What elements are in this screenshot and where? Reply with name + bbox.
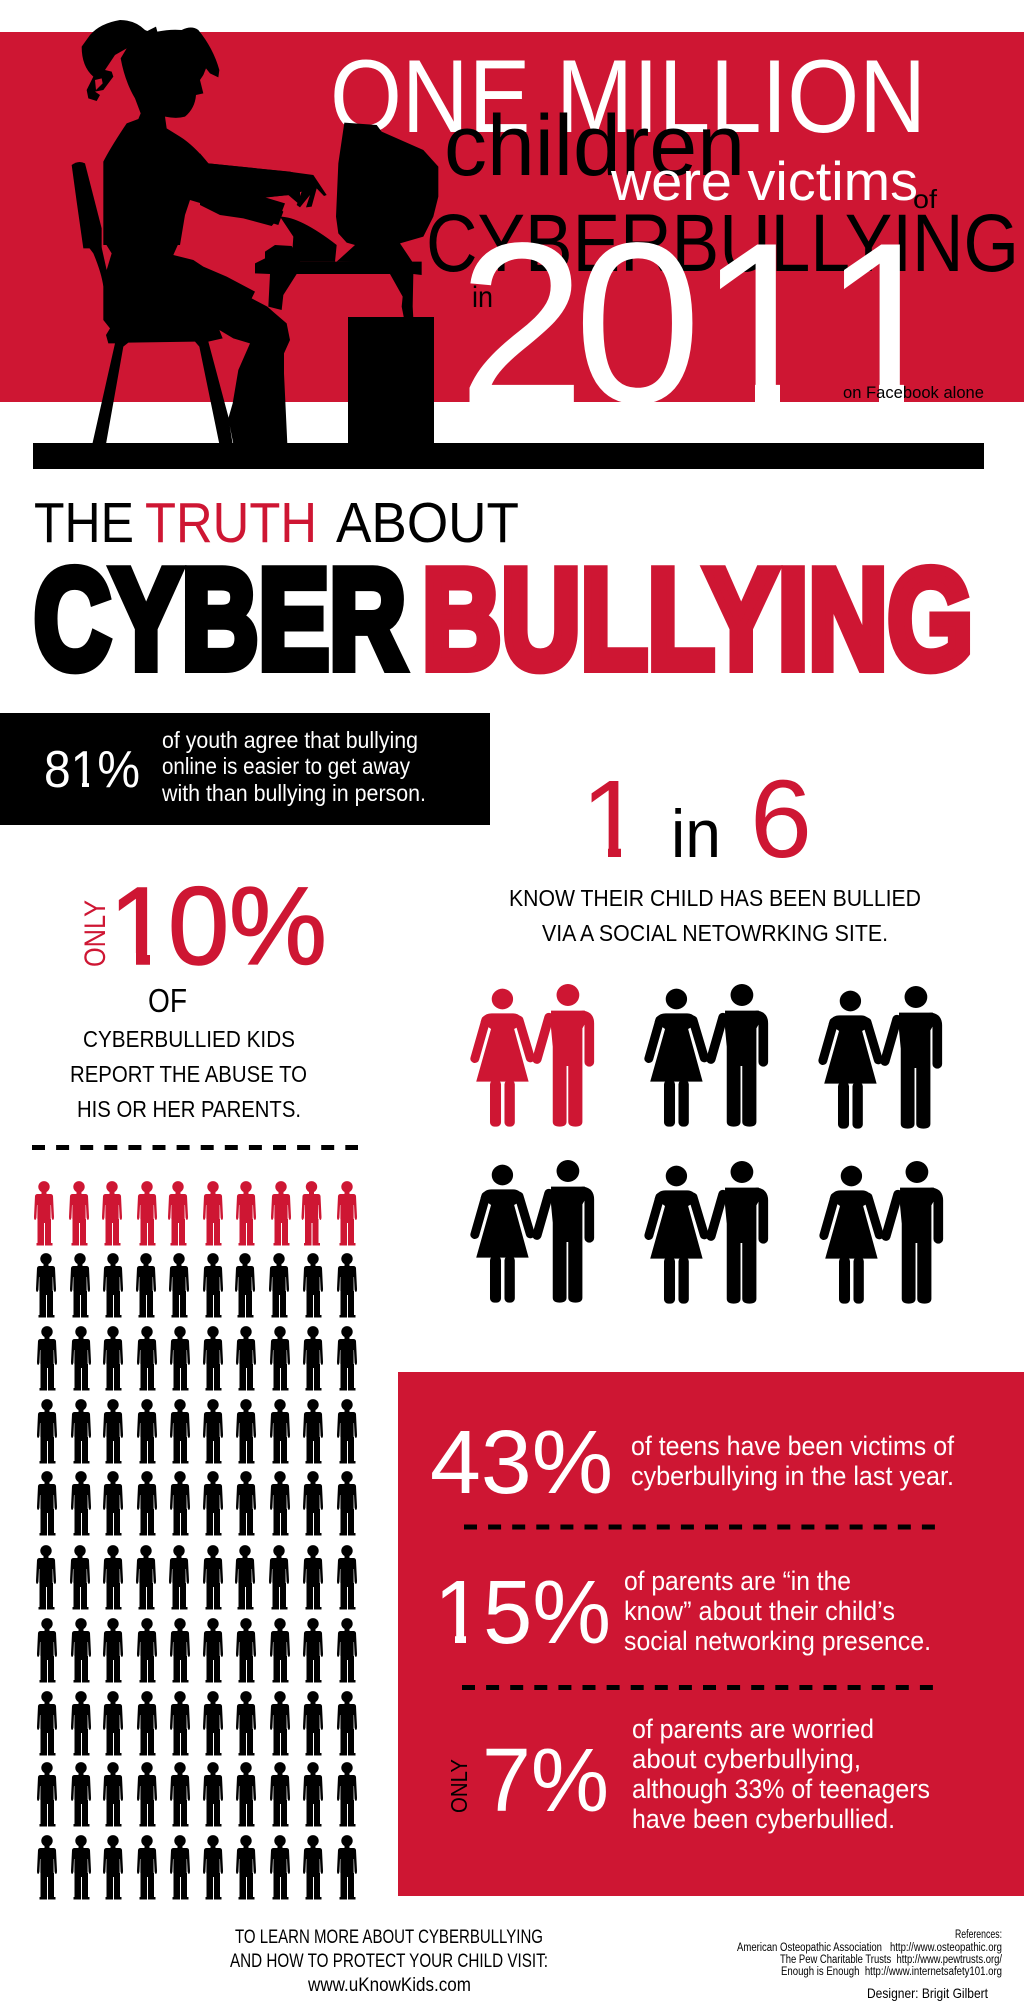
couple 6 — [824, 1161, 938, 1304]
black panel background — [0, 713, 490, 825]
headline: of: of — [913, 184, 938, 214]
girl lower body and chair — [83, 240, 290, 444]
panel: 81 percent stat — [0, 713, 490, 825]
couple 4 — [475, 1160, 589, 1303]
stat description 15%: social networking presence. — [624, 1626, 931, 1656]
stat description 15%: of parents are “in the — [624, 1566, 851, 1596]
red banner band — [0, 32, 1024, 402]
references: References: — [955, 1929, 1002, 1941]
title line: the truth about: THE — [34, 491, 134, 555]
word of: OF — [148, 982, 187, 1019]
headline: 2011: 2011 — [458, 195, 949, 451]
stat description: online is easier to get away — [162, 753, 410, 779]
computer tower — [348, 317, 434, 444]
word in: in — [671, 796, 721, 872]
digit 1: 1 — [581, 758, 642, 881]
couple 5 — [649, 1161, 763, 1304]
red panel background — [398, 1372, 1024, 1896]
footer call to action: AND HOW TO PROTECT YOUR CHILD VISIT: — [230, 1951, 548, 1972]
illustration: girl silhouette at computer — [72, 20, 438, 444]
couple 2 — [649, 984, 763, 1127]
stat description 43%: cyberbullying in the last year. — [631, 1461, 954, 1491]
stat description: VIA A SOCIAL NETOWRKING SITE. — [542, 920, 888, 946]
stat description 7%: of parents are worried — [632, 1714, 874, 1744]
footer call to action: www.uKnowKids.com — [307, 1975, 471, 1996]
stat number 15%: 15% — [434, 1563, 611, 1663]
stat number 10%: 10% — [109, 865, 327, 988]
stat number 1 in 6 — [592, 780, 808, 858]
stat number 81%: 81% — [44, 741, 140, 799]
headline: children: children — [444, 98, 745, 194]
panel: red statistics — [398, 1372, 1024, 1896]
row of red children — [34, 1181, 357, 1246]
stat description 7%: although 33% of teenagers — [632, 1774, 930, 1804]
stat description 43%: of teens have been victims of — [631, 1431, 954, 1461]
floor bar — [33, 443, 984, 469]
rows of black children — [36, 1253, 357, 1900]
stat number 43%: 43% — [430, 1413, 613, 1513]
digit 6: 6 — [750, 758, 812, 881]
headline: were victims: were victims — [610, 150, 918, 212]
pictogram: six parent couples, one in red — [475, 984, 938, 1304]
stat description: of youth agree that bullying — [162, 727, 418, 753]
girl head, hair and upper body — [82, 20, 300, 245]
title word: cyber: CYBER — [34, 540, 406, 699]
stat description: CYBERBULLIED KIDS — [83, 1026, 295, 1052]
stat description: with than bullying in person. — [161, 780, 426, 806]
pictogram: 100 children, ten in red — [34, 1181, 357, 1900]
stat description 7%: have been cyberbullied. — [632, 1804, 895, 1834]
girl arm, hand and forearm — [200, 153, 337, 262]
footer call to action: TO LEARN MORE ABOUT CYBERBULLYING — [235, 1927, 543, 1948]
panel: 1 in 6 stat — [475, 758, 938, 1304]
panel: only 10 percent stat — [72, 886, 324, 1117]
stat description: REPORT THE ABUSE TO — [70, 1061, 307, 1087]
headline: in: in — [472, 281, 493, 314]
stat description 7%: about cyberbullying, — [632, 1744, 861, 1774]
title line: the truth about: ABOUT — [336, 491, 519, 555]
title: the truth about cyberbullying — [34, 491, 973, 699]
stat description 15%: know” about their child’s — [624, 1596, 895, 1626]
stat description: HIS OR HER PARENTS. — [77, 1096, 301, 1122]
hero banner — [0, 20, 1024, 469]
desk and keyboard — [255, 245, 422, 318]
title line: the truth about: TRUTH — [145, 491, 317, 555]
stat number 7%: 7% — [482, 1731, 609, 1831]
rotated label only: ONLY — [79, 900, 112, 967]
caption: on Facebook alone: on Facebook alone — [843, 383, 984, 402]
designer credit: Designer: Brigit Gilbert — [867, 1985, 988, 2001]
couple 3 — [823, 986, 937, 1129]
rotated label only: ONLY — [446, 1759, 472, 1813]
chair back — [72, 162, 102, 248]
headline: one million: ONE MILLION — [330, 39, 926, 155]
computer monitor — [336, 123, 438, 263]
stat description: KNOW THEIR CHILD HAS BEEN BULLIED — [509, 885, 921, 911]
couple 1 red — [475, 984, 589, 1127]
